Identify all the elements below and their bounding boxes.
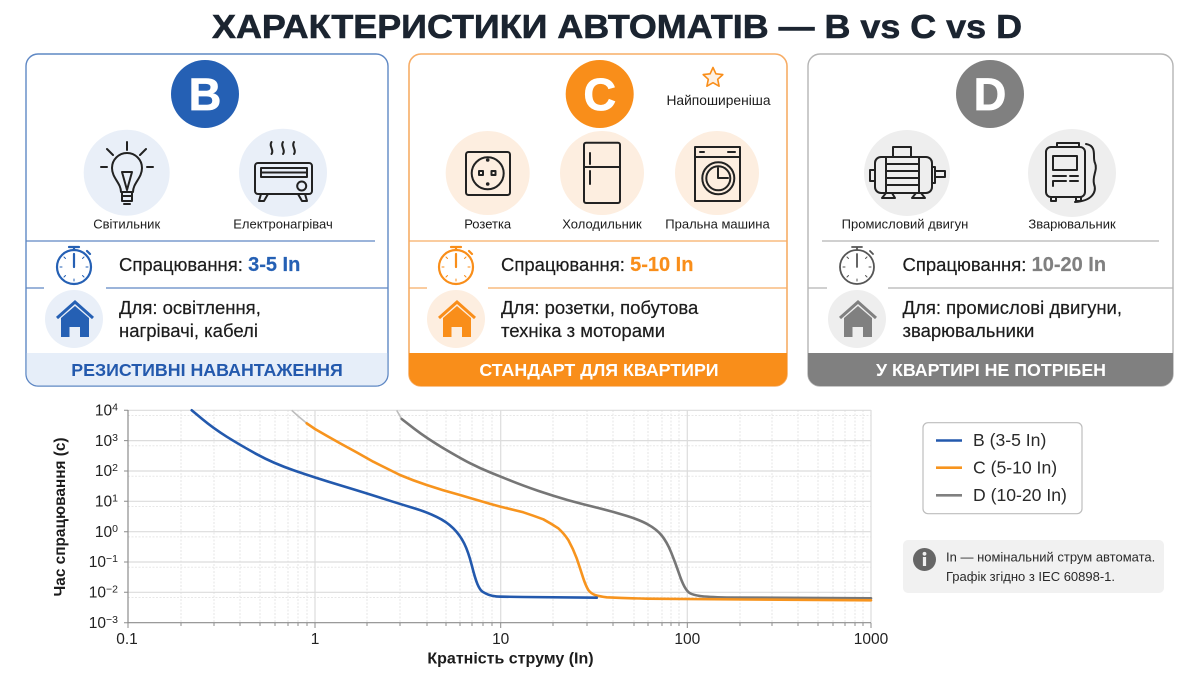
- x-axis labels: 100: [674, 631, 701, 648]
- curve: D thin start segments: [292, 410, 402, 423]
- y-axis labels: 4: [112, 402, 118, 414]
- badge label: most common: Найпоширеніша: [666, 93, 771, 108]
- note text: In — номінальний струм автомата.: [946, 550, 1155, 564]
- label: industrial motor: Промисловий двигун: [842, 216, 968, 232]
- y-axis labels: 10: [89, 554, 106, 571]
- icon: house: [45, 290, 103, 348]
- y-axis labels: 10: [95, 433, 112, 450]
- y-axis labels: 10: [95, 494, 112, 510]
- chart: tripping curves: [52, 402, 889, 668]
- y-axis labels: −3: [106, 614, 118, 626]
- x-axis title: Кратність струму (In): [427, 650, 594, 668]
- label: fridge: Холодильник: [562, 216, 642, 232]
- icon: info: [913, 548, 936, 571]
- x-axis labels: [116, 631, 889, 648]
- footer strip: resistive loads: [27, 353, 387, 386]
- icon: stopwatch: [439, 247, 473, 284]
- y-axis labels: [89, 402, 118, 632]
- label: lamp: Світильник: [93, 216, 160, 232]
- label: welder: Зварювальник: [1028, 216, 1116, 232]
- footer strip: resistive loads: РЕЗИСТИВНІ НАВАНТАЖЕННЯ: [71, 360, 343, 380]
- icon: washing machine: [675, 131, 759, 215]
- trip range text: Спрацювання: 5-10 In: [501, 254, 693, 276]
- y-axis labels: 10: [95, 402, 112, 420]
- y-axis labels: 10: [89, 584, 106, 602]
- usage text second line: зварювальники: [902, 320, 1034, 341]
- x-axis labels: 1000: [854, 631, 889, 648]
- note box: [903, 540, 1164, 593]
- legend: [923, 423, 1082, 514]
- legend: C (5-10 In): [973, 458, 1057, 478]
- icon: fridge: [560, 131, 644, 215]
- y-axis labels: −2: [106, 584, 118, 596]
- y-axis labels: 1: [112, 492, 118, 504]
- panel: type D: [808, 54, 1173, 386]
- x-axis labels: 1: [311, 631, 319, 648]
- note text second line: Графік згідно з IEC 60898-1.: [946, 569, 1115, 584]
- usage text: Для: освітлення,: [119, 297, 261, 318]
- title: ХАРАКТЕРИСТИКИ АВТОМАТІВ — B vs C vs D: [212, 8, 1022, 45]
- panel: type C: [409, 54, 787, 386]
- curve: D: [402, 419, 871, 598]
- y-axis labels: 0: [112, 523, 118, 535]
- icon: heater: [239, 129, 327, 217]
- badge C: [566, 60, 634, 128]
- icon: stopwatch: [57, 247, 91, 284]
- badge D: [956, 60, 1024, 128]
- icon: house: [427, 290, 485, 348]
- icon: industrial motor: [864, 130, 950, 216]
- icon: welder: [1028, 129, 1116, 217]
- dividers: [26, 241, 388, 288]
- usage text second line: техніка з моторами: [501, 320, 665, 341]
- curve: C: [307, 423, 871, 600]
- badge B: [171, 60, 239, 128]
- y-axis title: Час спрацювання (с): [52, 437, 69, 597]
- y-axis labels: −1: [106, 553, 118, 565]
- footer strip: not needed: У КВАРТИРІ НЕ ПОТРІБЕН: [876, 360, 1106, 380]
- x-axis labels: 10: [492, 631, 510, 648]
- footer strip: apartment standard: [409, 353, 787, 386]
- icon: stopwatch: [840, 247, 874, 284]
- legend: D (10-20 In): [973, 485, 1067, 505]
- y-axis labels: 3: [112, 432, 118, 444]
- curve: B: [192, 410, 597, 598]
- label: socket: Розетка: [464, 216, 512, 232]
- usage text: Для: розетки, побутова: [501, 297, 699, 318]
- usage text: Для: промислові двигуни,: [902, 297, 1122, 318]
- badge C: C: [583, 69, 616, 120]
- y-axis labels: 10: [89, 615, 106, 632]
- footer strip: apartment standard: СТАНДАРТ ДЛЯ КВАРТИРИ: [479, 360, 719, 380]
- panel: type B: [26, 54, 388, 386]
- dividers: [409, 241, 787, 288]
- icon: star: [703, 68, 723, 86]
- icon: socket: [446, 131, 530, 215]
- x-axis labels: 0.1: [116, 631, 138, 648]
- badge B: B: [189, 69, 221, 120]
- y-axis labels: 10: [95, 463, 112, 480]
- usage text second line: нагрівачі, кабелі: [119, 320, 258, 341]
- badge D: D: [974, 69, 1006, 120]
- icon: house: [828, 290, 886, 348]
- trip range text: Спрацювання: 3-5 In: [119, 254, 300, 276]
- footer strip: not needed: [808, 353, 1173, 386]
- y-axis labels: 2: [112, 462, 118, 474]
- label: heater: Електронагрівач: [233, 216, 333, 232]
- legend: B (3-5 In): [973, 430, 1046, 450]
- y-axis labels: 10: [95, 524, 112, 541]
- dividers: [808, 241, 1173, 288]
- label: washing machine: Пральна машина: [665, 216, 770, 232]
- trip range text: Спрацювання: 10-20 In: [902, 254, 1106, 276]
- icon: light bulb: [84, 130, 170, 216]
